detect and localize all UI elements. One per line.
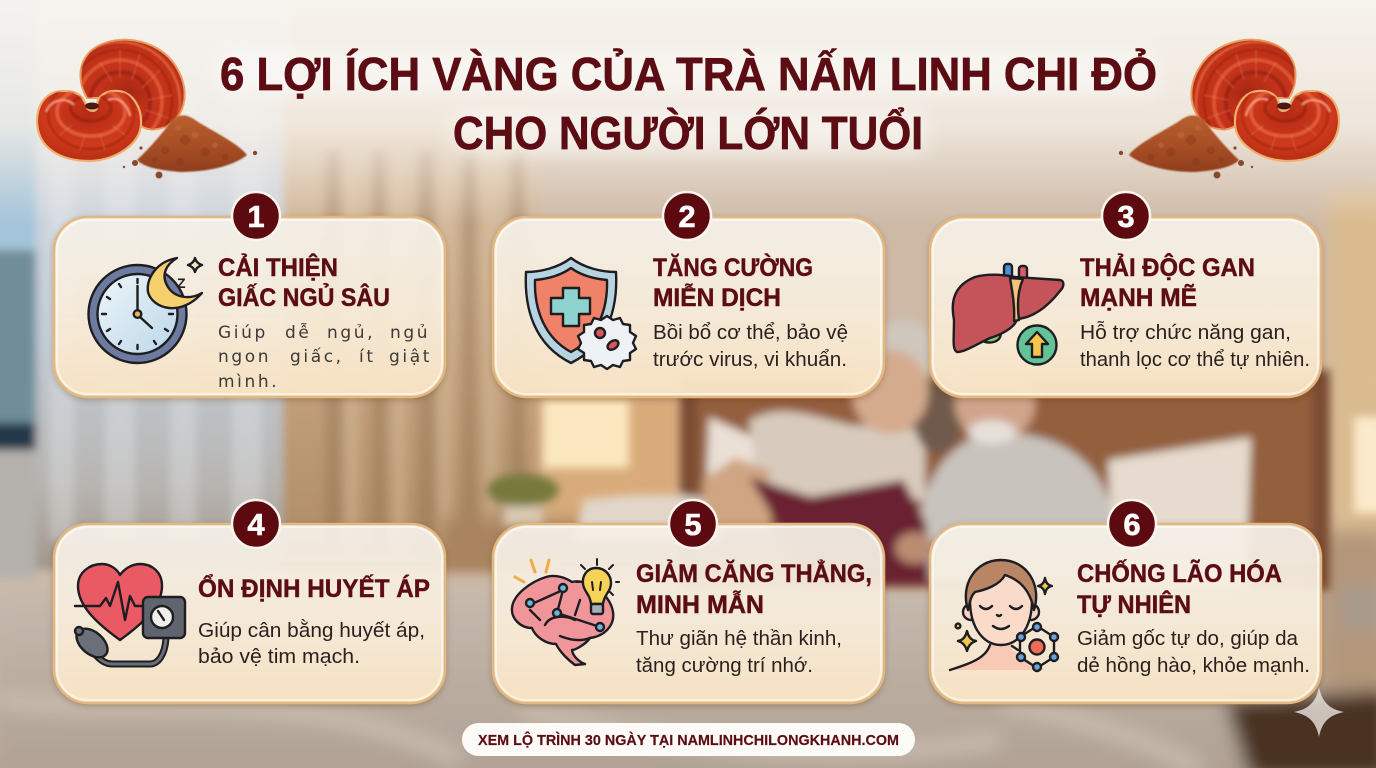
description: [1080, 321, 1310, 371]
description: Giúp: [218, 323, 268, 343]
description: Hỗ trợ chức năng gan,: [1080, 321, 1291, 344]
badge 6: 6: [1123, 507, 1141, 542]
description: [636, 627, 842, 677]
description: bảo vệ tim mạch.: [198, 645, 360, 668]
icon: heart and blood pressure monitor: [71, 564, 185, 664]
image: reishi mushrooms and powder, right: [1119, 40, 1339, 178]
heading: GIẢM CĂNG THẲNG,: [636, 558, 872, 588]
icon: clock with moon: Z: [177, 275, 186, 291]
heading: [1080, 252, 1255, 312]
badge 2: 2: [678, 199, 696, 234]
heading: ỔN ĐỊNH HUYẾT ÁP: [198, 573, 430, 603]
description: mình.: [218, 372, 279, 392]
heading: MINH MẪN: [636, 589, 764, 619]
badge 6: [1108, 500, 1156, 548]
description: ngủ: [390, 323, 430, 343]
heading: THẢI ĐỘC GAN: [1080, 252, 1255, 282]
description: giấc,: [290, 346, 344, 367]
heading: [636, 558, 872, 619]
description: giật: [389, 347, 432, 367]
badge 5: [669, 500, 717, 548]
badge 1: [232, 192, 280, 240]
icon: sparkle watermark: [1294, 687, 1344, 737]
badge 4: 4: [247, 507, 265, 542]
heading: [1077, 558, 1282, 619]
heading: GIẤC NGỦ SÂU: [218, 282, 390, 312]
icon: brain with light bulb: [512, 559, 619, 665]
icon: shield with germ: [526, 258, 636, 369]
call to action pill: XEM LỘ TRÌNH 30 NGÀY TẠI NAMLINHCHILONGKHANH.COM: [478, 731, 899, 749]
description: thanh lọc cơ thể tự nhiên.: [1080, 348, 1310, 371]
heading: MẠNH MẼ: [1080, 282, 1197, 312]
description: [198, 619, 425, 668]
icon: face with antioxidant molecule: [950, 560, 1058, 671]
heading: MIỄN DỊCH: [653, 282, 781, 312]
description: ngon: [218, 347, 271, 367]
panel: benefit 3: [930, 192, 1321, 397]
heading: TĂNG CƯỜNG: [653, 252, 813, 282]
panel: benefit 4: [54, 500, 445, 703]
description: Giúp cân bằng huyết áp,: [198, 619, 425, 642]
title: [215, 48, 1160, 159]
description: dễ: [285, 322, 311, 343]
description: dẻ hồng hào, khỏe mạnh.: [1077, 654, 1310, 677]
title: CHO NGƯỜI LỚN TUỔI: [453, 107, 923, 159]
badge 5: 5: [684, 507, 702, 542]
description: trước virus, vi khuẩn.: [653, 348, 847, 371]
description: [1077, 627, 1310, 677]
panel: benefit 6: [930, 500, 1321, 703]
heading: CHỐNG LÃO HÓA: [1077, 558, 1282, 588]
panel: benefit 5: [493, 500, 884, 703]
description: ngủ,: [327, 323, 375, 343]
icon: liver with up arrow: [953, 264, 1063, 364]
badge 3: [1102, 192, 1150, 240]
call to action pill: [462, 723, 915, 756]
image: reishi mushrooms and powder, left: [37, 40, 257, 178]
title: 6 LỢI ÍCH VÀNG CỦA TRÀ NẤM LINH CHI ĐỎ: [220, 48, 1157, 100]
badge 4: [232, 500, 280, 548]
heading: [218, 252, 390, 312]
description: Thư giãn hệ thần kinh,: [636, 627, 842, 650]
icon: clock with moon: [88, 258, 202, 363]
panel: benefit 2: [493, 192, 884, 397]
badge 3: 3: [1117, 199, 1135, 234]
description: [653, 321, 848, 371]
badge 1: 1: [247, 199, 265, 234]
heading: TỰ NHIÊN: [1077, 589, 1191, 619]
heading: CẢI THIỆN: [218, 252, 338, 282]
description: ít: [359, 347, 376, 367]
description: Giảm gốc tự do, giúp da: [1077, 627, 1299, 650]
description: [218, 322, 432, 392]
description: Bồi bổ cơ thể, bảo vệ: [653, 321, 848, 344]
description: tăng cường trí nhớ.: [636, 654, 813, 677]
badge 2: [663, 192, 711, 240]
panel: benefit 1: [54, 192, 445, 397]
heading: [653, 252, 813, 312]
